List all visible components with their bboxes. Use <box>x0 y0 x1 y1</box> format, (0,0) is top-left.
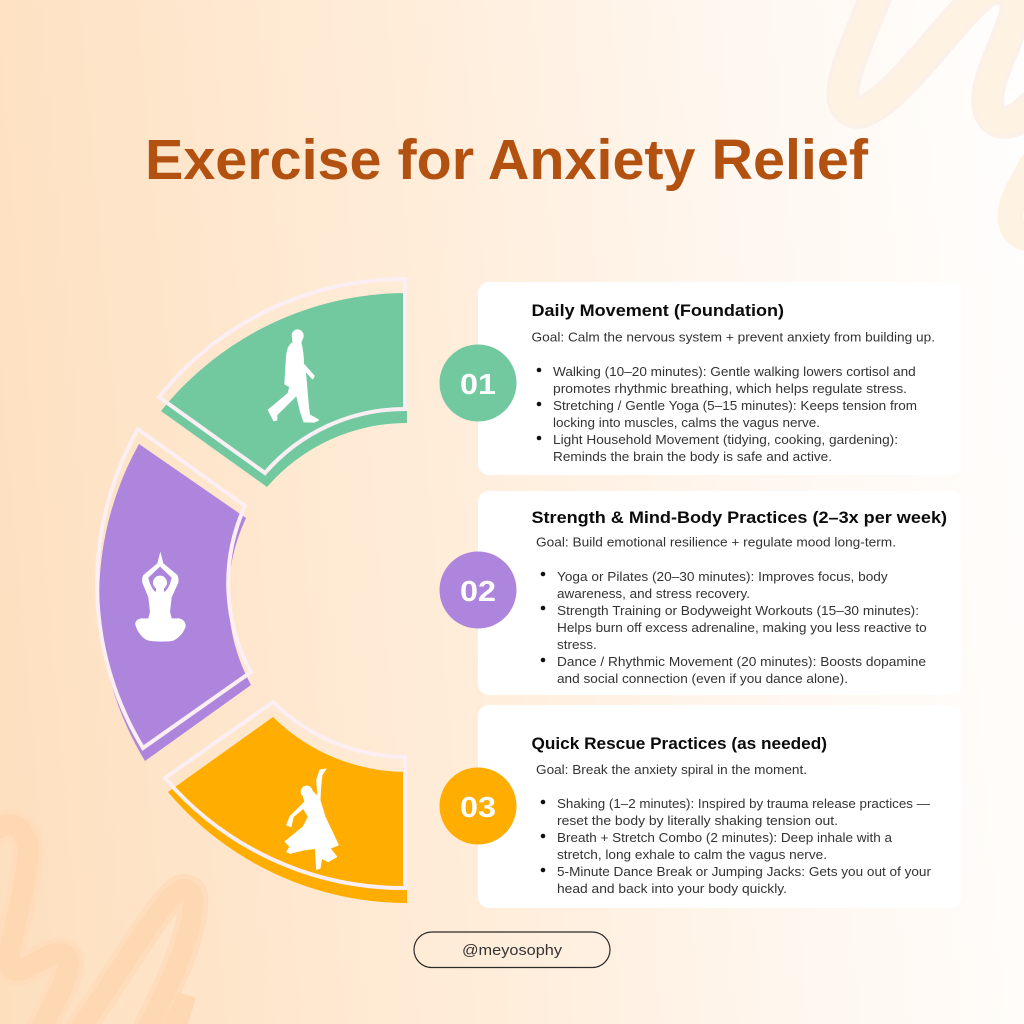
background squiggle: top right <box>843 0 1024 238</box>
handle pill <box>414 932 610 968</box>
number badge 01 <box>440 344 516 422</box>
bullet list 2: awareness, and stress recovery. <box>557 586 750 601</box>
background squiggle: bottom left <box>0 825 196 1024</box>
icon: walking person <box>268 329 318 422</box>
number badge 01: 01 <box>460 369 496 401</box>
heading: daily movement: Daily Movement (Foundation) <box>532 301 784 320</box>
bullet list 1: Light Household Movement (tidying, cooking, gardening): <box>553 432 898 447</box>
bullet list 2: Helps burn off excess adrenaline, making you less reactive to <box>557 620 927 635</box>
goal text 3: Goal: Break the anxiety spiral in the moment. <box>536 762 807 777</box>
number badge 02: 02 <box>460 576 496 608</box>
bullet list 3: head and back into your body quickly. <box>557 881 787 896</box>
bullet list 1 <box>537 364 917 464</box>
bullet list 1: Stretching / Gentle Yoga (5–15 minutes): Keeps tension from <box>553 398 917 413</box>
panel: daily movement <box>478 282 962 475</box>
bullet list 3: Shaking (1–2 minutes): Inspired by trauma release practices — <box>557 796 930 811</box>
title: Exercise for Anxiety Relief <box>145 128 869 192</box>
number badge 03: 03 <box>460 792 496 824</box>
bullet list 1: Walking (10–20 minutes): Gentle walking lowers cortisol and <box>553 364 916 379</box>
heading: strength: Strength & Mind-Body Practices (2–3x per week) <box>532 508 947 527</box>
bullet list 2 <box>541 569 927 686</box>
bullet list 3 <box>541 796 932 896</box>
panel: quick rescue <box>478 705 962 908</box>
bullet list 2: and social connection (even if you dance alone). <box>557 671 848 686</box>
bullet list 2: Yoga or Pilates (20–30 minutes): Improves focus, body <box>557 569 888 584</box>
icon: dancer <box>285 769 338 869</box>
segment: orange dance <box>165 702 407 903</box>
icon: meditating person <box>135 552 186 642</box>
handle pill: @meyosophy <box>462 942 563 959</box>
bullet list 1: promotes rhythmic breathing, which helps regulate stress. <box>553 381 907 396</box>
bullet list 1: locking into muscles, calms the vagus nerve. <box>553 415 820 430</box>
number badge 02 <box>440 552 516 628</box>
bullet list 3: 5-Minute Dance Break or Jumping Jacks: Gets you out of your <box>557 864 932 879</box>
segment: purple yoga <box>97 429 251 761</box>
bullet list 3: reset the body by literally shaking tension out. <box>557 813 838 828</box>
goal text 1: Goal: Calm the nervous system + prevent anxiety from building up. <box>532 330 935 344</box>
goal text 2: Goal: Build emotional resilience + regulate mood long-term. <box>536 534 896 550</box>
bullet list 2: Strength Training or Bodyweight Workouts (15–30 minutes): <box>557 603 919 618</box>
bullet list 2: Dance / Rhythmic Movement (20 minutes): Boosts dopamine <box>557 654 926 669</box>
bullet list 1: Reminds the brain the body is safe and active. <box>553 449 832 464</box>
number badge 03 <box>440 768 516 844</box>
bullet list 3: stretch, long exhale to calm the vagus nerve. <box>557 847 827 862</box>
panel: strength and mind-body <box>478 491 962 695</box>
heading: quick rescue: Quick Rescue Practices (as needed) <box>532 734 827 753</box>
bullet list 2: stress. <box>557 637 597 652</box>
bullet list 3: Breath + Stretch Combo (2 minutes): Deep inhale with a <box>557 830 893 845</box>
segment: green walking <box>159 279 407 487</box>
